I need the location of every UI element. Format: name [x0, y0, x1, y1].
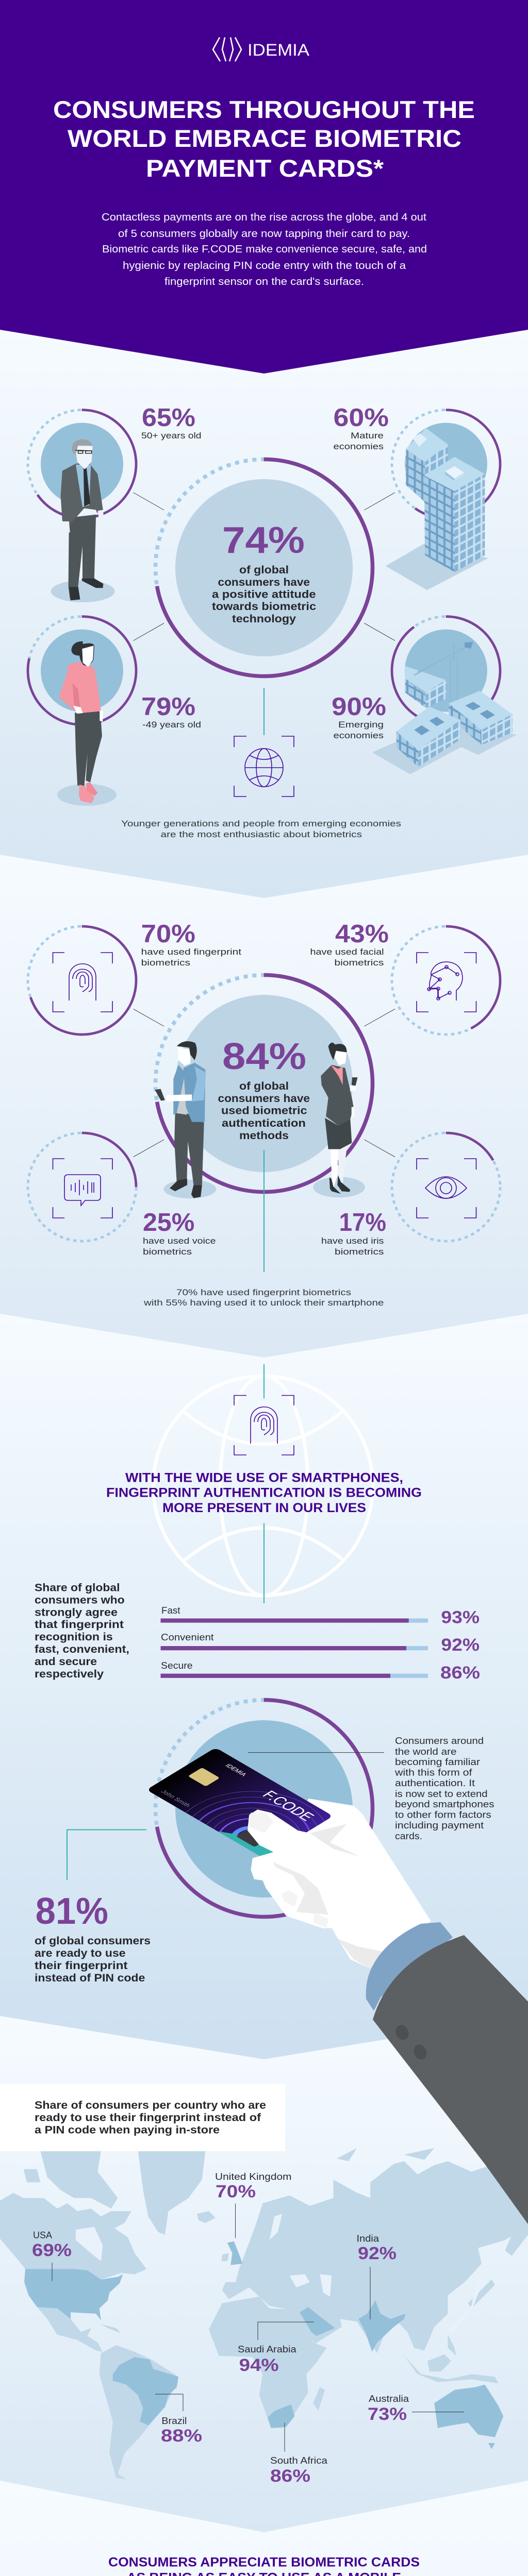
chart description: and secure: [35, 1656, 97, 1668]
label: South Africa: [270, 2455, 328, 2486]
callout text: beyond smartphones: [395, 1799, 494, 1809]
label: India: 92%: [358, 2244, 397, 2263]
label: United Kingdom: United Kingdom: [215, 2172, 292, 2182]
bar: fast: [161, 1605, 480, 1628]
payment card: [149, 1749, 331, 1856]
panel: fingerprint authentication: [35, 1364, 494, 1984]
illustration: hand holding F.CODE card: [149, 1749, 528, 2224]
label: United Kingdom: 70%: [216, 2182, 256, 2201]
label: Brazil: Brazil: [161, 2416, 187, 2426]
connector lines: [134, 493, 395, 641]
map caption box: ready to use their fingerprint instead of: [35, 2112, 261, 2124]
takeaway text: [121, 819, 401, 839]
ring: mature economies: [392, 410, 500, 518]
payment card: F.CODE: [258, 1788, 318, 1823]
panel: header: [0, 0, 528, 374]
stat: fingerprint: biometrics: [141, 958, 190, 968]
stat: 65%: 65%: [142, 404, 195, 432]
stat: 81%: are ready to use: [35, 1947, 126, 1959]
stat: 60%: Mature: [351, 431, 384, 440]
stat: 90%: Emerging: [338, 720, 384, 730]
chart description: consumers who: [35, 1594, 125, 1606]
ring: emerging economies: [392, 617, 500, 725]
central stat: consumers have: [218, 577, 310, 588]
ring: 81%: [156, 1700, 372, 1917]
section heading: CONSUMERS APPRECIATE BIOMETRIC CARDS: [108, 2555, 420, 2570]
bar: secure: 86%: [440, 1663, 480, 1683]
title: WORLD EMBRACE BIOMETRIC: [68, 125, 461, 152]
intro text: fingerprint sensor on the card's surface.: [164, 276, 364, 287]
icon: facial recognition: [417, 953, 476, 1012]
ring: iris: [392, 1133, 500, 1241]
map caption box: a PIN code when paying in-store: [35, 2124, 220, 2136]
bar: convenient: 92%: [441, 1635, 480, 1655]
stat: 65%: [141, 404, 201, 440]
icon: eye: [417, 1159, 476, 1218]
thumb and palm: [248, 1809, 382, 1969]
bar chart: fast, convenient, secure: [161, 1605, 480, 1683]
label: USA: 69%: [32, 2241, 72, 2260]
stat: iris: have used iris: [321, 1236, 384, 1246]
stat: facial: 43%: [335, 920, 389, 948]
bar: convenient: Convenient: [161, 1632, 213, 1642]
intro text: hygienic by replacing PIN code entry with the touch of a: [123, 260, 406, 272]
stat: 79%: -49 years old: [142, 720, 201, 730]
stat: 79%: [141, 693, 201, 730]
payment card: John Smith: [159, 1789, 192, 1808]
intro text: Biometric cards like F.CODE make convenience secure, safe, and: [102, 244, 427, 255]
central stat: technology: [232, 613, 296, 625]
stat: 81%: their fingerprint: [35, 1960, 128, 1972]
central stat: [218, 1036, 310, 1142]
figure: man with phone: [155, 1041, 216, 1198]
takeaway text: 70% have used fingerprint biometrics: [176, 1288, 351, 1297]
stat: facial: [310, 920, 389, 968]
stat: iris: biometrics: [335, 1247, 384, 1257]
callout text: becoming familiar: [395, 1757, 480, 1767]
stat: 81%: 81%: [36, 1891, 108, 1932]
label: Australia: [368, 2394, 409, 2424]
stat: 60%: 60%: [333, 404, 389, 432]
illustration: construction site: [372, 642, 517, 774]
ring: fingerprint: [28, 926, 136, 1035]
central ring 74%: [156, 460, 372, 676]
takeaway text: Younger generations and people from emerging economies: [121, 819, 401, 828]
label: South Africa: South Africa: [270, 2455, 328, 2466]
chart description: fast, convenient,: [35, 1643, 129, 1655]
label: Brazil: [161, 2416, 202, 2446]
stat: 79%: 79%: [141, 693, 195, 721]
bar: convenient: [161, 1632, 480, 1655]
takeaway text: [143, 1288, 384, 1308]
highlighted countries: [24, 2242, 503, 2437]
world map: [0, 2148, 528, 2479]
label: Australia: 73%: [368, 2404, 407, 2424]
stat: voice: 25%: [143, 1209, 194, 1236]
central stat: authentication: [222, 1117, 306, 1129]
bar: fast: 93%: [441, 1608, 480, 1628]
ring: under 49 years old: [28, 617, 136, 725]
panel: biometric methods: [28, 920, 500, 1308]
stat: 65%: 50+ years old: [141, 431, 201, 440]
central ring 84%: [156, 975, 372, 1192]
stat: 90%: 90%: [332, 693, 386, 721]
stat: facial: have used facial: [310, 947, 384, 957]
callout text: including payment: [395, 1820, 484, 1831]
icon: globe: [234, 736, 294, 796]
ring: voice: [28, 1133, 136, 1241]
stat: voice: have used voice: [143, 1236, 216, 1246]
chart description: strongly agree: [35, 1606, 118, 1618]
label: USA: USA: [33, 2230, 52, 2240]
payment card: IDEMIA: [224, 1762, 248, 1777]
chart description: Share of global: [35, 1582, 120, 1594]
icon: voice: [53, 1159, 112, 1218]
background: authentication section: [0, 855, 528, 1358]
background: map section: [0, 2016, 528, 2532]
section heading: FINGERPRINT AUTHENTICATION IS BECOMING: [106, 1486, 422, 1500]
title: PAYMENT CARDS*: [146, 155, 384, 182]
figure: young woman: [57, 641, 117, 806]
map caption box: Share of consumers per country who are: [35, 2099, 266, 2111]
stat: 81%: instead of PIN code: [35, 1972, 145, 1984]
intro text: of 5 consumers globally are now tapping their card to pay.: [118, 228, 410, 240]
stat: voice: biometrics: [143, 1247, 192, 1257]
takeaway text: with 55% having used it to unlock their smartphone: [143, 1298, 384, 1308]
callout text: [394, 1736, 494, 1841]
intro text: [102, 212, 427, 287]
callout text: authentication. It: [395, 1778, 475, 1788]
figure: older man: [51, 439, 115, 602]
section heading: [108, 2555, 420, 2576]
stat: fingerprint: have used fingerprint: [141, 947, 241, 957]
label: Brazil: 88%: [161, 2426, 202, 2446]
stat: iris: 17%: [339, 1209, 386, 1236]
jacket sleeve: [373, 1935, 528, 2224]
background: closing section: [0, 2481, 528, 2576]
icon: fingerprint: [53, 953, 112, 1012]
label: Saudi Arabia: Saudi Arabia: [238, 2344, 297, 2354]
callout text: cards.: [395, 1831, 422, 1841]
panel: cards versus wallets: [109, 2557, 419, 2576]
central stat: methods: [239, 1130, 289, 1142]
logo: [213, 37, 310, 61]
chart description: [35, 1582, 129, 1680]
central stat: 84%: [222, 1036, 306, 1077]
label: South Africa: 86%: [270, 2466, 310, 2486]
section heading: WITH THE WIDE USE OF SMARTPHONES,: [125, 1471, 403, 1485]
label: United Kingdom: [215, 2172, 292, 2201]
background: fingerprint section: [0, 1314, 528, 2059]
callout text: Consumers around: [395, 1736, 484, 1746]
stat: 90%: economies: [333, 731, 384, 740]
intro text: Contactless payments are on the rise across the globe, and 4 out: [102, 212, 426, 223]
central stat: [212, 520, 316, 625]
takeaway text: are the most enthusiastic about biometrics: [161, 830, 362, 839]
stat: voice: [143, 1209, 216, 1257]
ring: 50+ years old: [28, 410, 136, 518]
chart description: that fingerprint: [35, 1619, 124, 1631]
stat: 81%: [35, 1891, 151, 1984]
bar: fast: Fast: [161, 1605, 180, 1616]
label: Saudi Arabia: [238, 2344, 297, 2375]
panel: world map: [0, 2084, 528, 2486]
stat: 81%: of global consumers: [35, 1935, 151, 1947]
stat: fingerprint: [141, 920, 241, 968]
hand behind card: [286, 1799, 431, 1969]
ring: facial: [392, 926, 500, 1035]
map leader lines: [52, 2204, 464, 2452]
callout text: is now set to extend: [395, 1789, 488, 1799]
title: CONSUMERS THROUGHOUT THE: [53, 96, 475, 123]
background: attitude section: [0, 330, 528, 898]
callout text: the world are: [395, 1747, 457, 1757]
section heading: MORE PRESENT IN OUR LIVES: [162, 1501, 366, 1515]
central stat: used biometric: [221, 1105, 307, 1117]
chart description: recognition is: [35, 1631, 113, 1643]
central stat: of global: [239, 1080, 289, 1092]
callout text: to other form factors: [395, 1810, 491, 1820]
logo: IDEMIA: [248, 41, 310, 59]
stat: 90%: [332, 693, 386, 740]
label: USA: [32, 2230, 72, 2260]
central stat: 74%: [222, 520, 305, 561]
central stat: towards biometric: [212, 601, 316, 613]
stat: 60%: [333, 404, 389, 451]
stat: fingerprint: 70%: [141, 920, 195, 948]
label: India: India: [357, 2233, 380, 2244]
label: Australia: Australia: [369, 2394, 409, 2404]
central stat: of global: [239, 564, 289, 576]
stat: 60%: economies: [333, 442, 384, 451]
illustration: office towers: [386, 428, 488, 590]
map caption box: [0, 2084, 285, 2151]
title: [53, 96, 475, 182]
panel: positive attitude: [28, 404, 517, 839]
decorative globe outline: [153, 1376, 373, 1596]
icon: fingerprint: [234, 1395, 294, 1455]
central stat: a positive attitude: [212, 588, 316, 601]
shirt cuff: [366, 1922, 453, 2011]
central stat: consumers have: [218, 1093, 310, 1105]
label: India: [357, 2233, 397, 2263]
sleeve buttons: [393, 2023, 429, 2062]
connector lines: [134, 1009, 395, 1157]
chart description: respectively: [35, 1668, 104, 1680]
bar: secure: [161, 1660, 480, 1683]
stat: facial: biometrics: [334, 958, 384, 968]
figure: businesswoman with phone: [313, 1043, 365, 1197]
label: Saudi Arabia: 94%: [239, 2355, 279, 2375]
section heading: [106, 1471, 422, 1515]
stat: iris: [321, 1209, 386, 1257]
callout text: with this form of: [394, 1767, 473, 1777]
water bodies: [76, 2214, 485, 2332]
bar: secure: Secure: [161, 1660, 193, 1671]
